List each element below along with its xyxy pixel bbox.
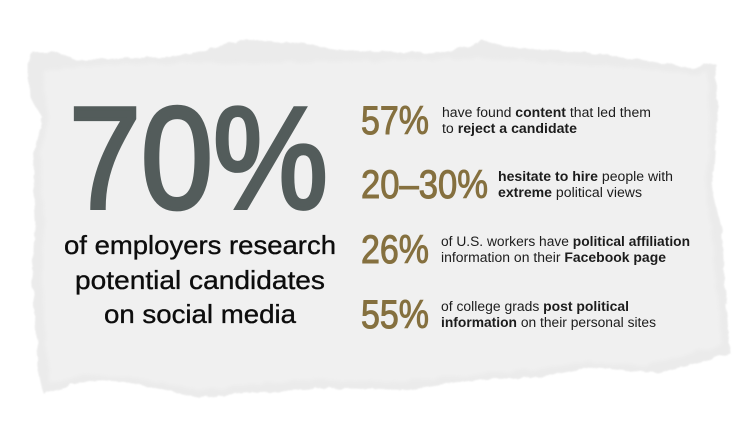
headline caption: of employers research [64, 230, 336, 260]
headline caption: on social media [104, 299, 297, 329]
stat row: 57%: 57% [361, 99, 429, 143]
stat row: 26%: 26% [361, 228, 429, 272]
paper surface [40, 58, 722, 390]
stat row: 20–30%: 20–30% [361, 163, 488, 207]
stat row: 20–30% [361, 163, 673, 207]
stat row: 20–30%: hesitate to hire people with [498, 169, 673, 184]
stat row: 26%: of U.S. workers have political affiliation [441, 234, 690, 249]
stat row: 20–30%: extreme political views [498, 185, 642, 200]
headline caption [64, 230, 336, 329]
stat row: 55%: 55% [361, 293, 429, 337]
stat row: 55% [361, 293, 656, 337]
headline statistic: 70%: 70% [69, 77, 328, 239]
headline caption: potential candidates [75, 265, 325, 295]
stat row: 26%: information on their Facebook page [441, 250, 667, 265]
stat row: 57% [361, 99, 651, 143]
stat row: 57%: have found content that led them [442, 105, 651, 120]
stat row: 55%: information on their personal sites [441, 315, 656, 330]
stat row: 55%: of college grads post political [441, 299, 629, 314]
stat row: 57%: to reject a candidate [442, 121, 578, 136]
panel: torn paper [28, 40, 730, 398]
torn outer edge [28, 40, 730, 398]
stat row: 26% [361, 228, 690, 272]
